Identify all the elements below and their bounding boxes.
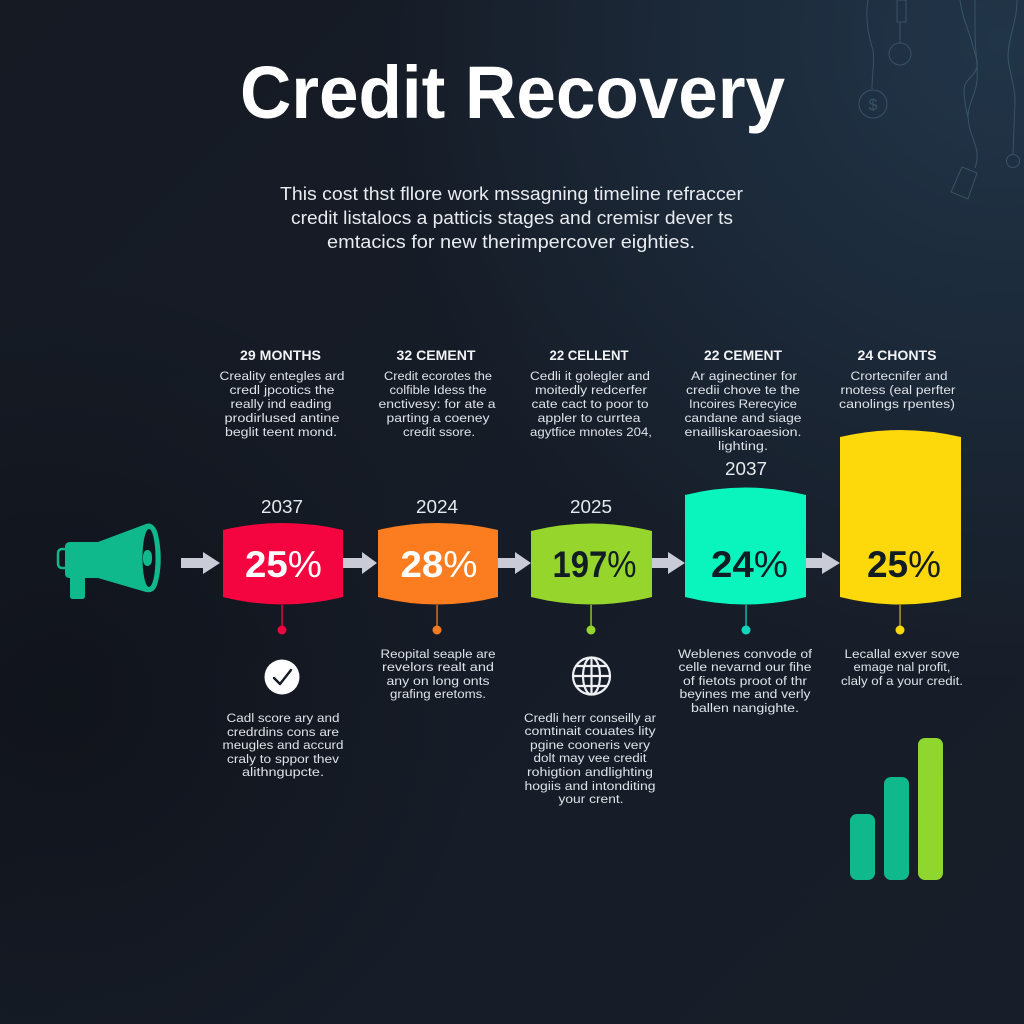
stage 5 box — [840, 430, 961, 604]
stage 2 note: revelors realt and — [382, 660, 494, 674]
stage 4 description: Incoires Rerecyice — [689, 397, 797, 411]
stage 2 marker — [432, 605, 442, 634]
stage 3 note — [524, 711, 656, 806]
stage 2 description: enctivesy: for ate a — [378, 397, 496, 411]
stage 2 heading: 32 CEMENT — [396, 347, 476, 363]
stage 2 value: 28% — [400, 544, 478, 585]
stage 4 description: candane and siage — [684, 411, 802, 425]
stage 2 box — [378, 523, 498, 604]
intro text — [280, 184, 743, 252]
stage 1 note: Cadl score ary and — [226, 711, 340, 725]
icon: check mark — [264, 660, 300, 694]
stage 2 note: any on long onts — [386, 674, 490, 688]
stage 4 box — [685, 488, 806, 604]
stage 4 description: lighting. — [718, 439, 768, 453]
stage 1 note: credrdins cons are — [227, 725, 339, 739]
stage 1 marker — [278, 605, 286, 634]
arrow: megaphone to stage 1 — [181, 552, 220, 574]
stage 3 note: your crent. — [558, 792, 624, 806]
stage 4 note: celle nevarnd our fihe — [678, 660, 812, 674]
stage 3 description — [530, 369, 652, 439]
stage 1 — [220, 347, 345, 779]
stage 5 note: Lecallal exver sove — [844, 647, 960, 661]
stage 5 description: canolings rpentes) — [839, 397, 955, 411]
stage 4 note: ballen nangighte. — [691, 701, 799, 715]
stage 2 description — [378, 369, 496, 439]
stage 5 — [839, 347, 963, 688]
stage 4 description: enailliskaroaesion. — [684, 425, 802, 439]
stage 4 — [678, 347, 813, 715]
stage 4 description: Ar aginectiner for — [691, 369, 797, 383]
stage 2 note: Reopital seaple are — [380, 647, 496, 661]
stage 4 note: Weblenes convode of — [678, 647, 813, 661]
arrow: stage 1 to stage 2 — [343, 552, 377, 574]
stage 3 description: appler to currtea — [538, 411, 641, 425]
stage 5 marker — [896, 605, 904, 634]
intro text: This cost thst fllore work mssagning timeline refraccer — [280, 184, 743, 204]
title: Credit Recovery — [240, 51, 785, 134]
stage 5 description: Crortecnifer and — [850, 369, 948, 383]
stage 3 note: hogiis and intonditing — [524, 779, 656, 793]
stage 1 note: craly to sppor thev — [227, 752, 340, 766]
stage 1 description — [220, 369, 345, 439]
stage 4 value: 24% — [711, 544, 788, 585]
stage 1 description: beglit teent mond. — [225, 425, 337, 439]
stage 2 description: colfible Idess the — [390, 383, 487, 397]
stage 1 box — [223, 523, 343, 604]
stage 3 heading: 22 CELLENT — [550, 347, 629, 363]
stage 5 note — [841, 647, 963, 688]
stage 3 note: comtinait couates lity — [524, 724, 656, 738]
intro text: credit listalocs a patticis stages and cremisr dever ts — [291, 208, 733, 228]
stage 2 — [378, 347, 498, 701]
stage 1 note: meugles and accurd — [222, 738, 344, 752]
stage 2 year: 2024 — [416, 497, 458, 517]
stage 4 note — [678, 647, 813, 715]
stage 3 description: agytfice mnotes 204, — [530, 425, 652, 439]
stage 5 description: rnotess (eal perfter — [840, 383, 956, 397]
stage 3 note: Credli herr conseilly ar — [524, 711, 656, 725]
stage 3 note: dolt may vee credit — [534, 751, 647, 765]
stage 4 note: beyines me and verly — [680, 687, 811, 701]
arrow: stage 3 to stage 4 — [652, 552, 685, 574]
stage 1 value: 25% — [245, 544, 322, 585]
stage 3 — [524, 347, 656, 806]
stage 5 note: emage nal profit, — [854, 660, 950, 674]
stage 1 note: alithngupcte. — [242, 765, 324, 779]
stage 1 description: credl jpcotics the — [230, 383, 335, 397]
stage 3 description: Cedli it golegler and — [530, 369, 650, 383]
stage 5 heading: 24 CHONTS — [858, 347, 936, 363]
stage 2 note — [380, 647, 496, 701]
stage 3 note: pgine cooneris very — [530, 738, 651, 752]
icon: megaphone — [58, 523, 161, 599]
stage 4 note: of fietots proot of thr — [683, 674, 807, 688]
stage 5 description — [839, 369, 956, 411]
stage 1 note — [222, 711, 344, 779]
decorative hanging line icons: $ — [869, 97, 878, 114]
icon: globe — [573, 658, 610, 694]
intro text: emtacics for new therimpercover eighties. — [327, 232, 695, 252]
stage 3 description: cate cact to poor to — [532, 397, 649, 411]
stage 4 description: credii chove te the — [686, 383, 800, 397]
stage 4 marker — [742, 605, 750, 634]
stage 3 marker — [586, 605, 596, 634]
stage 2 description: credit ssore. — [403, 425, 475, 439]
stage 4 year: 2037 — [725, 459, 767, 479]
stage 5 note: claly of a your credit. — [841, 674, 963, 688]
stage 3 year: 2025 — [570, 497, 612, 517]
stage 2 note: grafing eretoms. — [390, 687, 486, 701]
stage 3 description: moitedly redcerfer — [535, 383, 647, 397]
decorative hanging line icons — [859, 0, 1020, 199]
stage 3 box — [531, 524, 652, 604]
stage 1 year: 2037 — [261, 497, 303, 517]
stage 3 value: 197% — [552, 544, 636, 585]
stage 2 description: parting a coeney — [386, 411, 490, 425]
stage 4 description — [684, 369, 802, 453]
icon: growth bar chart — [850, 738, 943, 880]
stage 4 heading: 22 CEMENT — [704, 347, 782, 363]
arrow: stage 4 to stage 5 — [806, 552, 840, 574]
stage 3 note: rohigtion andlighting — [527, 765, 653, 779]
stage 2 description: Credit ecorotes the — [384, 369, 492, 383]
stage 1 heading: 29 MONTHS — [240, 347, 321, 363]
arrow: stage 2 to stage 3 — [498, 552, 531, 574]
stage 1 description: really ind eading — [230, 397, 332, 411]
stage 1 description: prodirlused antine — [224, 411, 340, 425]
stage 5 value: 25% — [867, 544, 941, 585]
stage 1 description: Creality entegles ard — [220, 369, 345, 383]
